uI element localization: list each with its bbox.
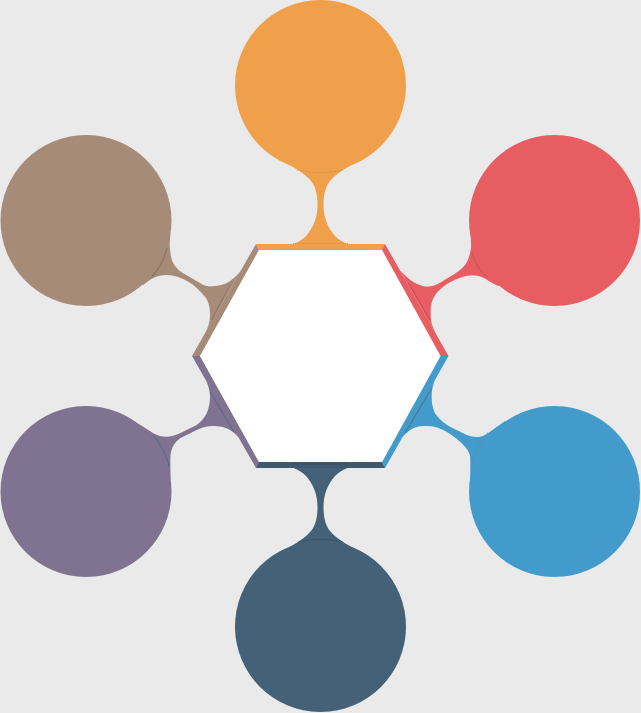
hexagon edge band: orange: [256, 244, 385, 250]
arm: purple lower-left circle: [0, 380, 240, 577]
hexagon edge band: blue: [382, 356, 448, 468]
arm: blue lower-right circle: [400, 380, 640, 577]
hexagon edge band: purple: [192, 356, 259, 468]
central white hexagon: [200, 250, 440, 462]
arm: navy bottom circle: [235, 467, 406, 712]
band seams: [152, 170, 488, 542]
arm: red upper-right circle: [400, 135, 640, 335]
arm: brown upper-left circle: [0, 135, 241, 335]
arm: orange top circle: [235, 0, 406, 245]
hexagon edge band: navy: [256, 462, 385, 468]
hexagon edge band: brown: [192, 244, 259, 356]
hexagon edge band: red: [382, 244, 448, 356]
